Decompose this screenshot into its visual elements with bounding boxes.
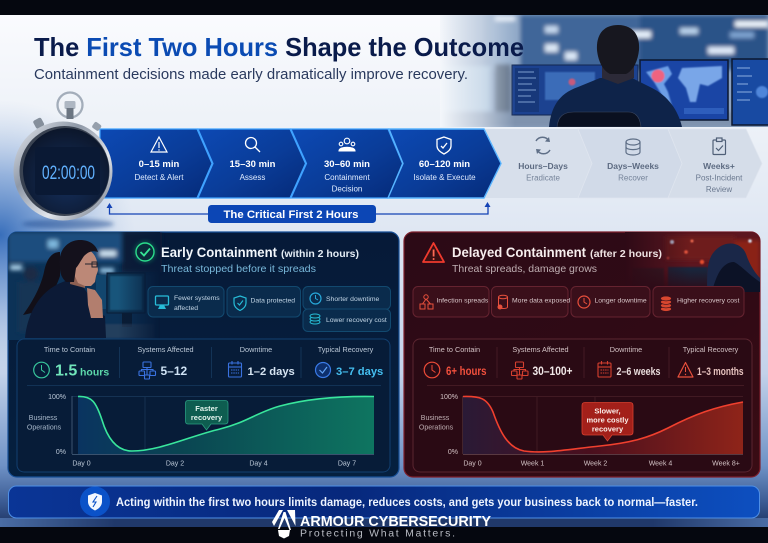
chart: business operations recovery, delayed: Day 0 <box>463 460 482 468</box>
banner: key takeaway <box>8 486 760 518</box>
chart: business operations recovery, early: Day 2 <box>166 460 184 468</box>
chip: longer downtime: Longer downtime <box>594 298 647 304</box>
man silhouette <box>549 25 682 127</box>
stat: downtime: Downtime <box>610 345 642 354</box>
step: hours-days <box>470 129 593 198</box>
logo: armour cybersecurity <box>272 510 491 540</box>
left monitor <box>512 65 638 115</box>
callout: slower, more costly recovery <box>582 402 633 441</box>
chip: lower recovery cost: Lower recovery cost <box>326 317 387 324</box>
title: The First Two Hours Shape the Outcome <box>34 32 524 62</box>
step: weeks+ <box>668 129 762 198</box>
chart: business operations recovery, delayed: Week 2 <box>584 460 607 468</box>
stat: systems affected: 5–12 <box>160 364 188 378</box>
chip: more data exposed: More data exposed <box>512 298 570 304</box>
chart: business operations recovery, delayed: Week 8+ <box>712 460 740 468</box>
stat: systems affected <box>137 345 194 379</box>
step: weeks+: Review <box>706 185 732 194</box>
stat: time to contain: Time to Contain <box>429 345 480 354</box>
step: 60-120 min: Isolate & Execute <box>413 173 476 182</box>
callout: faster recovery <box>186 400 228 430</box>
chart: business operations recovery, early <box>27 394 374 468</box>
step: 60-120 min <box>388 129 501 198</box>
chart: business operations recovery, early: 0% <box>56 449 66 456</box>
stat: downtime: 2–6 weeks <box>616 366 660 378</box>
chart: business operations recovery, delayed: Operations <box>419 424 454 432</box>
stat: typical recovery: Typical Recovery <box>683 345 739 354</box>
step: 15-30 min: 15–30 min <box>230 159 276 170</box>
step: 30-60 min <box>291 129 402 198</box>
timeline: later recovery steps <box>470 129 762 198</box>
chip: higher recovery cost <box>653 286 744 317</box>
hero photo: analyst at monitors <box>440 15 768 127</box>
chip: longer downtime <box>571 286 650 317</box>
callout: slower, more costly recovery: recovery <box>592 424 624 434</box>
subtitle: Containment decisions made early dramatically improve recovery. <box>34 67 468 83</box>
chip: data protected <box>227 286 300 317</box>
far right monitor <box>732 59 768 125</box>
chart: business operations recovery, delayed: Week 1 <box>521 460 544 468</box>
chip: shorter downtime <box>303 286 390 310</box>
chart: business operations recovery, delayed: 0% <box>448 449 458 456</box>
chart: business operations recovery, delayed: 100% <box>440 394 458 401</box>
stat: systems affected: Systems Affected <box>512 345 569 354</box>
stat: typical recovery: 1–3 months <box>697 366 744 378</box>
stat: typical recovery: 3–7 days <box>336 366 383 378</box>
chart: business operations recovery, early: Operations <box>27 424 62 432</box>
heading: delayed containment: Threat spreads, damage grows <box>452 263 597 275</box>
chip: infection spreads <box>413 286 489 317</box>
stat: systems affected: Systems Affected <box>137 345 194 354</box>
callout: slower, more costly recovery: Slower, <box>594 406 621 416</box>
stat: downtime: 1–2 days <box>248 366 295 378</box>
chip: fewer systems affected <box>148 286 224 317</box>
stat: time to contain <box>424 345 486 378</box>
heading: early containment: Early Containment <box>161 244 277 260</box>
stat: typical recovery <box>316 345 383 378</box>
stats and recovery chart box <box>413 339 752 472</box>
stat: downtime <box>228 345 295 378</box>
stat: downtime <box>598 345 660 378</box>
chip: fewer systems affected: Fewer systems <box>174 295 220 302</box>
chip: data protected: Data protected <box>250 298 295 304</box>
step: 15-30 min: Assess <box>240 173 265 182</box>
heading: delayed containment: Delayed Containment <box>452 244 586 260</box>
callout: faster recovery: Faster <box>195 404 218 413</box>
stat: time to contain: 6+ hours <box>446 366 486 378</box>
stat: systems affected: 30–100+ <box>532 366 573 378</box>
chart: business operations recovery, delayed <box>419 394 743 468</box>
stat: time to contain: 1.5 <box>55 362 77 380</box>
step: 30-60 min: 30–60 min <box>324 159 370 170</box>
panel: early containment <box>8 232 399 477</box>
right monitor: world map <box>640 60 728 120</box>
chart: business operations recovery, early: Day 0 <box>72 460 91 468</box>
logo: armour cybersecurity: Protecting What Matters. <box>300 528 455 540</box>
step: 30-60 min: Decision <box>332 184 362 194</box>
icon: stopwatch: 02:00:00 <box>42 163 95 184</box>
step: 30-60 min: Containment <box>324 173 370 182</box>
step: hours-days: Eradicate <box>526 174 560 182</box>
stats and recovery chart box <box>17 339 390 472</box>
stat: systems affected <box>512 345 573 379</box>
heading: delayed containment: (after 2 hours) <box>590 248 662 260</box>
label: critical first 2 hours <box>208 205 376 223</box>
step: hours-days: Hours–Days <box>518 161 568 171</box>
stat: time to contain: hours <box>80 366 109 378</box>
icon: armour logo mark <box>272 510 296 538</box>
chip: fewer systems affected: affected <box>174 305 198 312</box>
bracket: critical first 2 hours <box>106 202 490 223</box>
chart: business operations recovery, early: 100% <box>48 394 66 401</box>
step: days-weeks: Days–Weeks <box>607 161 659 171</box>
photo: hooded attacker <box>625 232 760 292</box>
heading: early containment: Threat stopped before it spreads <box>161 263 316 275</box>
chart: business operations recovery, delayed: Week 4 <box>649 460 672 468</box>
chart: business operations recovery, delayed: Business <box>421 415 450 422</box>
callout: slower, more costly recovery: more costly <box>586 416 629 424</box>
chart: business operations recovery, early: Day 4 <box>249 460 268 468</box>
chip: lower recovery cost <box>303 309 390 332</box>
stat: time to contain: Time to Contain <box>44 345 95 354</box>
logo: armour cybersecurity: ARMOUR CYBERSECURITY <box>300 513 491 530</box>
stat: downtime: Downtime <box>240 345 272 354</box>
heading: early containment: (within 2 hours) <box>281 248 359 260</box>
heading: delayed containment <box>423 243 662 275</box>
step: 0-15 min: Detect & Alert <box>135 173 184 182</box>
chip: higher recovery cost: Higher recovery cost <box>677 298 739 304</box>
chip: more data exposed <box>492 286 570 317</box>
stat: typical recovery: Typical Recovery <box>318 345 374 354</box>
step: days-weeks <box>578 129 683 198</box>
chip: infection spreads: Infection spreads <box>436 298 489 304</box>
banner: key takeaway: Acting within the first two hours limits damage, reduces costs, and gets your business back to normal—faster. <box>116 497 698 509</box>
step: weeks+: Weeks+ <box>703 161 735 171</box>
step: 0-15 min: 0–15 min <box>139 159 180 170</box>
step: days-weeks: Recover <box>618 174 648 182</box>
step: 60-120 min: 60–120 min <box>419 159 470 170</box>
stat: typical recovery <box>678 345 744 378</box>
photo: analyst woman <box>8 232 162 340</box>
step: 15-30 min <box>198 129 306 198</box>
label: critical first 2 hours: The Critical First 2 Hours <box>224 209 358 221</box>
callout: faster recovery: recovery <box>191 413 223 422</box>
panel: delayed containment <box>404 232 760 477</box>
stat: time to contain <box>34 345 109 380</box>
step: weeks+: Post-Incident <box>696 174 743 182</box>
icon: stopwatch <box>14 92 114 229</box>
chart: business operations recovery, early: Day 7 <box>338 460 356 468</box>
icon: shield <box>80 486 110 516</box>
step: 0-15 min <box>100 129 212 198</box>
heading: early containment <box>134 241 359 275</box>
chart: business operations recovery, early: Business <box>29 415 58 422</box>
chip: shorter downtime: Shorter downtime <box>326 296 379 303</box>
timeline: first two hours steps <box>100 129 501 198</box>
